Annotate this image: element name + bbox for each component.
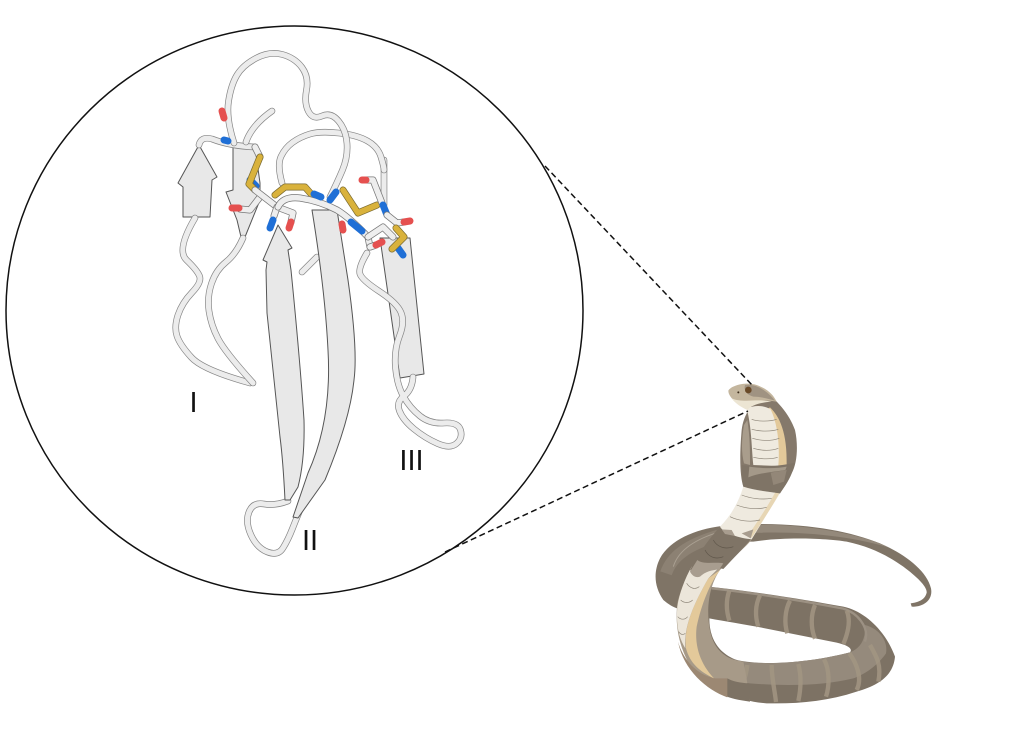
jaw xyxy=(732,398,772,410)
upper belly cream xyxy=(720,487,780,539)
tail lighter top xyxy=(740,525,888,547)
eye xyxy=(745,387,752,393)
lower body loop xyxy=(697,586,895,703)
stub behind strand xyxy=(302,257,317,272)
band scale lines xyxy=(705,540,733,558)
lower belly cream xyxy=(677,567,718,648)
scale lines xyxy=(678,419,779,634)
front body silhouette xyxy=(677,527,752,702)
loop III tube xyxy=(360,253,461,446)
loop I tube inner xyxy=(208,238,253,383)
strand II left arrow xyxy=(263,225,304,500)
loop II tube xyxy=(247,493,307,553)
left arrow strand xyxy=(178,145,217,217)
pale patch on band xyxy=(690,560,723,577)
tan edge on belly xyxy=(750,493,777,537)
pale bands on loop xyxy=(727,591,879,702)
cobra illustration xyxy=(656,384,931,703)
strand II right xyxy=(293,210,355,518)
loop behind strand III xyxy=(381,160,387,205)
zoom circle xyxy=(6,26,583,595)
head xyxy=(728,384,777,406)
loop I tube outer xyxy=(176,218,250,383)
side chains xyxy=(222,111,410,255)
inner loop B xyxy=(279,132,384,183)
tan hood edge xyxy=(767,407,787,466)
cream throat xyxy=(747,406,779,466)
lower band lighter half xyxy=(709,625,886,685)
label III: III xyxy=(399,445,424,477)
back coil and tail xyxy=(656,524,931,609)
blotch on belly xyxy=(722,529,753,538)
neck band xyxy=(742,463,795,493)
band pale strip xyxy=(748,467,787,477)
short stub top xyxy=(246,111,272,142)
top connector between strands xyxy=(199,138,255,147)
dark part of lower front xyxy=(723,678,750,702)
brown lower patch xyxy=(678,642,727,697)
neck dark band xyxy=(690,527,752,573)
tan belly stripe xyxy=(686,570,720,678)
strand III xyxy=(380,238,424,378)
protein structure xyxy=(176,53,461,553)
top loop A xyxy=(228,53,347,197)
nostril xyxy=(737,391,739,393)
band patch xyxy=(771,470,787,485)
coil lighter band xyxy=(666,536,718,573)
top rim of upper band xyxy=(712,588,866,642)
label I: I xyxy=(189,387,198,419)
dashed zoom lines xyxy=(445,166,752,552)
crown xyxy=(745,385,775,401)
hood left flap light xyxy=(742,420,750,465)
coil pale line xyxy=(673,533,715,567)
second strand arrow xyxy=(226,147,260,237)
label II: II xyxy=(302,525,318,557)
hood xyxy=(740,386,797,493)
